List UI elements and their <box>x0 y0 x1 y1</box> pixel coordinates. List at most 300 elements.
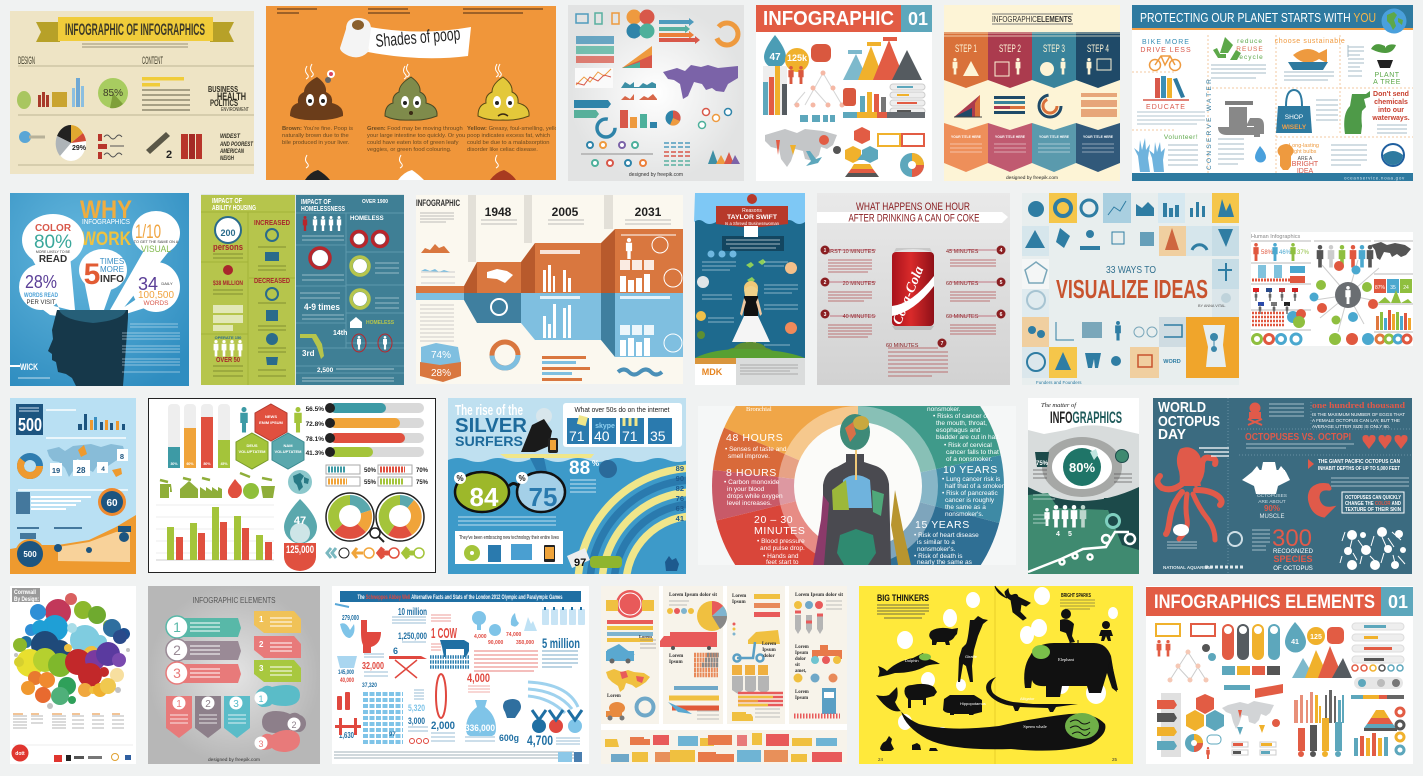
seafood: choose sustainable <box>1275 38 1345 45</box>
bars column two <box>669 688 719 708</box>
panel: smoking timeline human body <box>423 100 1287 776</box>
chart: 85 percent pie: 85% <box>103 88 123 99</box>
page numbers: 25 <box>1112 757 1118 762</box>
3000: 3,000 <box>408 716 425 726</box>
ring chart <box>716 23 738 45</box>
88 percent: 88 <box>569 458 590 479</box>
percent column: 41 <box>676 514 684 523</box>
animal labels: Alligator <box>1020 696 1035 701</box>
drop 47 <box>764 35 786 68</box>
balloons <box>811 656 841 664</box>
text: 20 30 minutes: • Hands and <box>763 553 799 560</box>
drop 47: 47 <box>294 515 306 527</box>
intro box <box>722 226 784 251</box>
icon: toilet roll and title <box>340 18 471 58</box>
percent column: 82 <box>676 484 684 493</box>
panel: the matter of infographics <box>1028 398 1139 574</box>
88 percent: % <box>592 459 599 468</box>
icon: bulb: IDEA <box>1297 168 1313 175</box>
chart: multicolour pie: 29% <box>72 145 87 152</box>
4000 bag: 336,000 <box>465 723 495 734</box>
panel: transport lorem ipsum: Ipsum <box>669 660 683 665</box>
concrete mixer <box>606 702 625 720</box>
text: nonsmoker: of a nonsmoker. <box>946 456 992 463</box>
icons: small octopuses <box>1344 527 1406 570</box>
medals <box>532 710 582 733</box>
heading: BIG THINKERS <box>877 593 929 603</box>
badge 125 <box>284 543 316 571</box>
hexagons <box>1186 694 1224 731</box>
panel: transport lorem ipsum: Lorem <box>669 654 684 659</box>
people rows <box>576 36 614 63</box>
icon: books <box>181 134 202 159</box>
text: 10 years: half that of a smoker. <box>945 483 1006 490</box>
text: brown description <box>282 126 353 146</box>
green leaf tab <box>254 660 301 682</box>
section headings: DESIGN <box>18 55 35 67</box>
text: 8 hours: level increases. <box>727 500 772 507</box>
chart icons <box>1025 199 1234 371</box>
icons blue tree splash: 74,000 <box>506 632 522 638</box>
bulbs: 2 <box>291 720 297 730</box>
title and years: 2031 <box>635 205 662 219</box>
thought bubbles <box>897 587 1118 743</box>
panel: silver surfers <box>448 398 686 574</box>
chart: multicolour pie <box>56 125 87 161</box>
badge red <box>811 44 831 62</box>
eye: 80% <box>1069 460 1095 475</box>
percent row: 37% <box>1297 250 1310 256</box>
chart icons: WORD <box>1163 359 1181 365</box>
panel: transport lorem ipsum: sit <box>795 663 800 668</box>
horizontal bars <box>542 356 590 381</box>
icons blue tree splash <box>472 611 537 646</box>
title banner: Reasons <box>742 208 762 214</box>
mountain chart <box>843 37 922 80</box>
world map grey <box>765 129 837 167</box>
step 4 column <box>1076 32 1120 88</box>
head silhouette <box>48 310 128 386</box>
bottom panel: They've been embracing new technology their entire lives <box>459 535 559 541</box>
donut charts <box>326 493 424 541</box>
monkey <box>995 586 1030 620</box>
panel: taylor swift <box>694 193 805 385</box>
icon: brown poop <box>290 64 343 120</box>
bike text: DRIVE LESS <box>1140 47 1192 54</box>
panel: transport lorem ipsum <box>601 586 847 764</box>
stacked columns <box>1354 733 1388 756</box>
bubble: one tenth: TO GET THE SAME ON A <box>134 240 179 244</box>
panel: infographic elements steps <box>944 5 1120 181</box>
chart: 85 percent pie <box>98 78 128 108</box>
footer: oceanservice.noaa.gov <box>1344 176 1405 180</box>
legend text blocks <box>13 716 124 728</box>
panel: transport lorem ipsum: Lorem <box>639 634 652 639</box>
10 million: 37,320 <box>362 683 378 689</box>
small area charts <box>621 82 657 100</box>
icon: bulb: Long-lasting <box>1289 143 1319 149</box>
bubble: 34: 34 <box>138 274 158 294</box>
bubble: 5 times: INFO <box>100 274 124 285</box>
teal column: 3rd <box>302 349 315 358</box>
badge 500 <box>16 404 43 435</box>
chart: horizontal bars <box>142 77 190 110</box>
teal column: IMPACT OF <box>301 199 332 206</box>
panel: protecting our planet <box>1132 5 1413 181</box>
text: 10 years: • Lung cancer risk is <box>942 476 1001 483</box>
tags <box>1156 624 1215 636</box>
figures row <box>1317 245 1373 268</box>
network <box>698 108 732 128</box>
heading bright sparks <box>1060 593 1095 609</box>
panel: transport lorem ipsum: Ipsum <box>762 648 777 653</box>
panel: transport lorem ipsum: Ipsum <box>795 651 808 656</box>
item seven: 60 MINUTES <box>886 343 919 349</box>
text: 10 years <box>942 464 1006 518</box>
step 4 column: STEP 4 <box>1087 43 1109 55</box>
people <box>1157 640 1170 656</box>
title and years <box>416 198 662 219</box>
column four <box>794 593 843 634</box>
column three <box>732 594 780 644</box>
teal column: OVER 1900 <box>362 199 388 205</box>
text: one hundred thousand: IS THE MAXIMUM NUMBER OF EGGS THAT <box>1312 412 1405 418</box>
circle 500 <box>16 540 44 568</box>
volunteer: Volunteer! <box>1164 134 1198 141</box>
word cloud: ENVIRONMENT <box>221 107 249 113</box>
text: green description: could have eaten lots of green leafy <box>367 140 459 146</box>
icon: key <box>19 131 45 143</box>
bubble: 28: 28% <box>25 272 57 292</box>
ribbon title <box>36 17 234 42</box>
boxing glove <box>503 699 521 718</box>
panel: coke one hour <box>817 193 1010 385</box>
bubble: 28: WORDS READ <box>24 292 58 299</box>
drop <box>1255 146 1266 162</box>
heading: OCTOPUS <box>1158 413 1220 430</box>
airplane <box>668 702 692 714</box>
header <box>1132 5 1413 30</box>
text: giant pacific: INHABIT DEPTHS OF UP TO 5,000 FEET <box>1318 466 1400 472</box>
title and years: 1948 <box>485 205 512 219</box>
gear column <box>1396 708 1404 754</box>
heading: By Design: <box>14 597 39 603</box>
battery meters <box>1232 742 1276 755</box>
bike text: BIKE MORE <box>1142 39 1190 46</box>
bars <box>763 66 787 115</box>
title and years: 2005 <box>552 205 579 219</box>
text: 90 percent muscle: 90% <box>1264 504 1280 513</box>
circle 60: 60 <box>106 498 118 509</box>
light rays <box>30 240 170 318</box>
drops and badges: 125 <box>1310 634 1322 641</box>
body figure <box>813 414 911 565</box>
logo wick <box>10 362 50 378</box>
circle 500: 500 <box>23 550 37 559</box>
text: yellow description: Yellow: Greasy, foul-smelling, yellow <box>467 126 563 132</box>
mountains <box>1292 646 1352 678</box>
percent row <box>1253 243 1310 261</box>
bottom rings <box>1252 334 1411 344</box>
text: 300 species <box>1272 525 1314 572</box>
teal shield <box>224 696 250 738</box>
truck <box>606 644 635 664</box>
97 percent <box>567 548 622 569</box>
tube chart: 80% <box>203 462 211 466</box>
icons blue tree splash: 90,000 <box>488 640 504 646</box>
word cloud: BUSINESS <box>208 84 238 94</box>
text: one hundred thousand: AVERAGE LITTER SIZE IS ONLY 80. <box>1312 424 1390 430</box>
stripes <box>1252 313 1284 325</box>
elephant <box>1024 643 1118 697</box>
footer: Funders and Founders <box>1036 380 1082 385</box>
text: brown description: bile produced in your liver. <box>282 140 350 146</box>
progress bars <box>1352 623 1404 663</box>
panel: shades of poop <box>266 6 563 180</box>
panel: transport lorem ipsum: Lorem <box>762 642 777 647</box>
shop wisely bag: SHOP <box>1285 114 1303 121</box>
people <box>788 66 804 84</box>
icon: yellow poop <box>478 64 529 120</box>
teal column: HOMELESS <box>366 320 395 326</box>
text: 48 hours: 48 HOURS <box>726 432 783 444</box>
title <box>817 201 1008 224</box>
icon: toilet roll and title: Shades of poop <box>375 24 461 51</box>
red ribbon 3: 3 <box>173 665 181 681</box>
pie chart <box>697 601 727 631</box>
text: brown description: naturally brown due to the <box>282 133 349 139</box>
bar chart <box>620 110 657 128</box>
map stat cards: 8 <box>120 452 124 461</box>
text: octopuses vs octopi: OCTOPUSES VS. OCTOPI <box>1245 432 1351 443</box>
sheep <box>904 684 937 708</box>
batteries: 75% <box>416 480 429 486</box>
page numbers <box>878 757 1118 762</box>
sponsor logos <box>54 754 131 762</box>
text: 20 30 minutes <box>754 514 805 566</box>
tube chart: 45% <box>220 462 228 466</box>
icon: ironing board <box>389 646 427 678</box>
horizontal data rows <box>16 492 91 514</box>
red dumbbell <box>335 718 361 735</box>
icons: three hearts <box>1362 435 1408 449</box>
chemicals text: chemicals <box>1374 99 1408 106</box>
tube chart <box>168 404 230 468</box>
glasses: % <box>456 474 464 483</box>
header: INFOGRAPHICS ELEMENTS <box>1154 592 1375 613</box>
bubble: color 80: MORE LIKELY TO BE <box>36 250 71 254</box>
ring chart <box>492 342 518 368</box>
batteries <box>326 465 429 486</box>
bubble: color 80: READ <box>39 254 67 265</box>
volunteer <box>1134 134 1198 172</box>
text: 8 hours: drops while oxygen <box>727 493 783 500</box>
paragraph lines <box>122 324 180 372</box>
column three: Ipsum <box>732 600 746 605</box>
grass <box>695 349 805 358</box>
green column: persons <box>213 242 243 252</box>
credit: designed by freepik.com <box>208 757 260 763</box>
panel: fortune 500 <box>10 398 136 574</box>
heading: INFOGRAPHIC ELEMENTS <box>192 596 276 605</box>
chemicals text <box>1371 91 1410 122</box>
animal labels: Dolphin <box>905 658 919 663</box>
ribbon title: INFOGRAPHIC OF INFOGRAPHICS <box>65 20 205 39</box>
text: nonsmoker: esophagus and <box>936 427 981 434</box>
progress bars <box>306 403 424 457</box>
88 percent <box>569 458 617 492</box>
panel: impact of homelessness <box>201 194 404 385</box>
panel: the matter of infographics: 4 <box>1056 531 1060 538</box>
title: AFTER DRINKING A CAN OF COKE <box>848 212 980 224</box>
stat tiles: 35 <box>1390 285 1396 291</box>
bubble: 34 <box>132 262 180 312</box>
word cloud <box>208 84 249 113</box>
grey vertical bands <box>468 195 613 262</box>
heading: WORLD <box>1158 399 1206 416</box>
green column <box>201 195 295 385</box>
text block: NEIGH <box>220 155 234 162</box>
numbered left items: 40 MINUTES <box>843 314 875 320</box>
grid of blue boxes <box>363 694 403 742</box>
header <box>340 591 581 602</box>
percent column: 76 <box>676 494 684 503</box>
recycle: reduce <box>1237 38 1263 45</box>
shop wisely bag <box>1276 90 1312 133</box>
side icons: 75% <box>1036 461 1049 467</box>
badge 125 <box>785 48 809 72</box>
circle eye small <box>1104 498 1128 529</box>
stat tiles: 87% <box>1375 285 1386 291</box>
4700 and 600g: 4,700 <box>527 732 553 748</box>
orange panel <box>1186 317 1239 378</box>
timeline pins <box>54 526 131 553</box>
text: 15 years: is similar to a <box>917 539 955 546</box>
circles row <box>794 674 838 682</box>
panel: big thinkers: Sperm whale <box>1023 724 1047 729</box>
vertical labels <box>1222 624 1280 660</box>
batteries: 70% <box>416 468 429 474</box>
badge 74 and 28: 74% <box>431 350 451 361</box>
teal ribbon 1 <box>166 616 241 638</box>
animal labels: Giraffe <box>965 654 978 659</box>
panel: designed infographic with world map <box>568 5 744 181</box>
numbered right items: 6 <box>1000 312 1003 318</box>
recycle: recycle <box>1236 54 1264 61</box>
grid <box>664 143 690 165</box>
heading why <box>80 196 132 250</box>
heading: The rise of the <box>455 402 523 419</box>
text: yellow description <box>467 126 556 151</box>
icon: bulb <box>1278 143 1319 175</box>
numbered right items <box>946 246 1006 320</box>
text block: AMERICAN <box>219 148 244 155</box>
4700 and 600g <box>499 732 553 748</box>
heading <box>12 588 40 603</box>
text: 15 years: • Risk of heart disease <box>914 532 979 539</box>
octopus <box>1157 447 1222 540</box>
figures <box>240 407 302 432</box>
text: octopuses vs octopi <box>1245 432 1354 448</box>
magnifier <box>370 528 384 542</box>
panel: world octopus day <box>1153 398 1412 588</box>
step 1 column: STEP 1 <box>955 43 977 55</box>
badge 125: 125,000 <box>286 544 314 556</box>
icon: bulb: light bulbs <box>1292 149 1317 155</box>
bulbs <box>254 685 306 752</box>
donut <box>1185 734 1203 752</box>
text: 15 years <box>914 519 979 566</box>
text: 90 percent muscle <box>1257 493 1287 520</box>
text: green description <box>367 126 465 153</box>
icon: skull <box>1248 402 1262 425</box>
10 million <box>362 607 427 689</box>
10 million: 10 million <box>398 607 427 618</box>
tube chart: 60% <box>186 462 194 466</box>
chemicals text: into our <box>1378 107 1404 114</box>
icons circles <box>667 608 694 614</box>
chemicals text: waterways. <box>1371 115 1410 122</box>
C ring <box>597 119 615 137</box>
title banner: Is a Shrewd Businesswoman <box>725 221 779 227</box>
panel: infographics elements 01 <box>1146 586 1413 764</box>
icon: quarter <box>1228 532 1242 546</box>
plant a tree: A TREE <box>1373 79 1401 86</box>
teal column: 2,500 <box>317 367 334 374</box>
step 1 column <box>944 32 988 88</box>
text: 300 species: 300 <box>1272 525 1312 552</box>
footer <box>1163 565 1243 570</box>
icon: NOAA <box>1381 143 1405 167</box>
heading <box>1158 399 1220 443</box>
plant a tree <box>1348 44 1401 86</box>
drop 47: 47 <box>769 52 781 63</box>
batteries: 50% <box>364 468 377 474</box>
glasses <box>454 472 565 512</box>
area chart <box>622 46 652 68</box>
world map <box>663 65 738 99</box>
panel: big thinkers: Elephant <box>1058 657 1075 662</box>
gas pump <box>822 688 836 714</box>
text: 10 years: nonsmoker's. <box>945 511 984 518</box>
icons: bottom row poops <box>305 155 516 180</box>
small cat rat frog <box>880 736 938 751</box>
educate <box>1137 76 1205 124</box>
panel: transport lorem ipsum: dolor <box>795 657 807 662</box>
text: 15 years: 15 YEARS <box>915 519 970 531</box>
lower chevrons: YOUR TITLE HERE <box>1039 134 1069 139</box>
heading: Human Infographics <box>1251 234 1300 240</box>
icon: globe <box>1382 8 1406 34</box>
one cow <box>431 615 469 657</box>
pixel grid <box>694 655 718 675</box>
teal shield: 3 <box>233 699 239 710</box>
money flying <box>746 259 766 293</box>
paragraph red <box>474 651 538 671</box>
text: brown description: Brown: You're fine. Poop is <box>282 126 353 132</box>
text: 15 years: • Risk of death is <box>914 553 963 560</box>
text: giant pacific <box>1308 459 1400 472</box>
column two heading <box>669 593 717 605</box>
hatch badge <box>146 132 172 161</box>
text: 20 30 minutes: and pulse drop. <box>760 545 805 552</box>
3d blocks orange <box>464 229 683 293</box>
text: nonsmoker <box>927 406 1001 463</box>
3000 <box>389 703 425 738</box>
header: PROTECTING OUR PLANET STARTS WITH YOU <box>1140 10 1376 25</box>
text: 10 years: 10 YEARS <box>943 464 998 476</box>
bottles <box>542 609 585 625</box>
